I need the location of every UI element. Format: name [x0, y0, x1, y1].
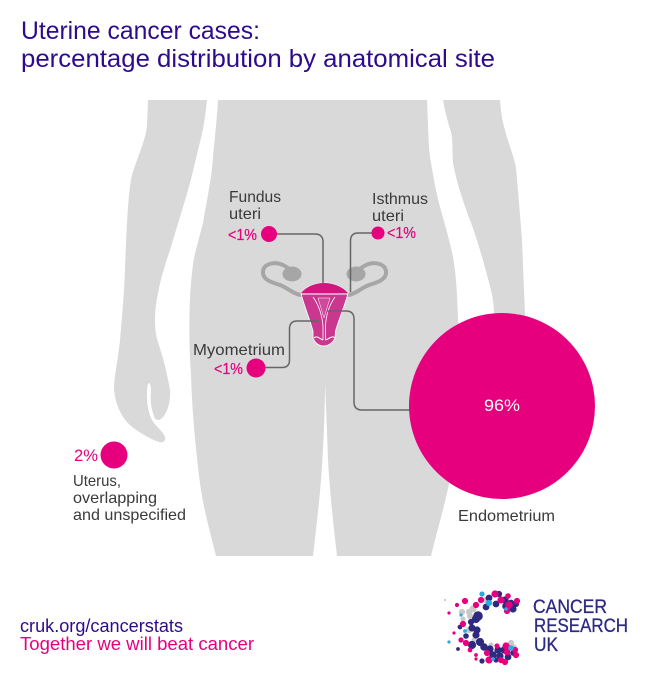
myometrium callout: <1%	[214, 361, 243, 378]
title: Uterine cancer cases:	[21, 17, 260, 45]
uterus overlapping and unspecified callout	[73, 442, 186, 524]
logo wordmark: UK	[534, 634, 558, 656]
torso and legs	[189, 100, 460, 556]
logo wordmark: RESEARCH	[534, 615, 628, 637]
uterus overlapping and unspecified callout: 2%	[74, 446, 98, 465]
uterus overlapping and unspecified callout: Uterus,	[73, 473, 121, 490]
footer text: Together we will beat cancer	[20, 634, 254, 654]
fallopian tubes	[263, 263, 386, 295]
leader lines	[264, 233, 410, 410]
left arm	[114, 100, 207, 442]
logo wordmark: CANCER	[533, 596, 607, 618]
myometrium callout	[193, 342, 285, 378]
isthmus uteri callout: uteri	[372, 208, 404, 225]
Cancer Research UK logo	[444, 591, 628, 664]
endometrium callout: 96%	[484, 396, 520, 415]
fundus uteri callout: Fundus	[229, 189, 281, 206]
isthmus uteri callout	[372, 191, 428, 242]
fundus uteri callout	[228, 189, 281, 244]
footer text: cruk.org/cancerstats	[20, 616, 183, 636]
uterus overlapping and unspecified callout: overlapping	[73, 490, 157, 507]
title: percentage distribution by anatomical site	[21, 45, 495, 73]
title	[21, 17, 495, 73]
logo mark: dotted C	[444, 591, 520, 664]
isthmus uteri callout: <1%	[387, 225, 416, 242]
myometrium callout: Myometrium	[193, 342, 285, 359]
right arm	[443, 100, 525, 400]
reproductive organs	[263, 263, 386, 346]
endometrium callout	[409, 313, 595, 525]
logo wordmark	[533, 596, 628, 656]
fundus uteri callout: uteri	[229, 206, 261, 223]
body silhouette	[114, 100, 525, 556]
footer text	[20, 616, 254, 654]
endometrium callout: Endometrium	[458, 508, 555, 525]
fundus uteri callout: <1%	[228, 227, 257, 244]
uterus	[301, 283, 348, 346]
isthmus uteri callout: Isthmus	[372, 191, 428, 208]
ovaries	[282, 266, 366, 282]
uterus overlapping and unspecified callout: and unspecified	[73, 507, 186, 524]
